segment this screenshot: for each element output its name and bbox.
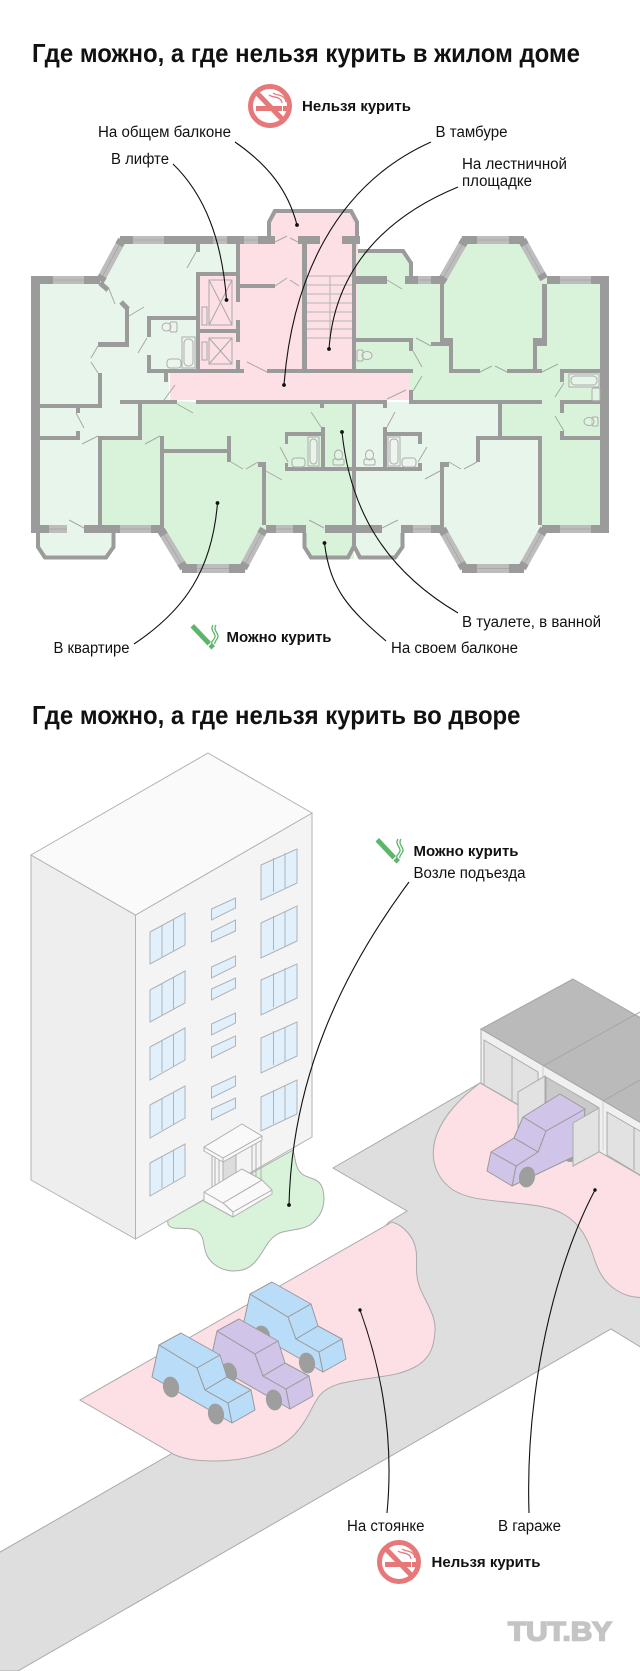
leader and label: в гараже — [498, 1188, 597, 1535]
legend label: Нельзя курить — [302, 98, 411, 115]
leader and label: на общем балконе — [98, 124, 299, 227]
zone: smoking allowed near entrance — [168, 1150, 324, 1271]
garage door right — [607, 1112, 640, 1178]
legend label: Можно курить — [414, 843, 518, 860]
fixtures: sinks — [167, 359, 600, 467]
leader and label: на своем балконе — [323, 541, 518, 657]
legend: smoking allowed in yard — [376, 838, 518, 864]
leader and label: на своем балконе: На своем балконе — [391, 640, 518, 657]
leader and label: на стоянке — [347, 1308, 424, 1535]
illustration: yard — [0, 753, 640, 1671]
legend: smoking allowed in floor plan — [190, 624, 332, 650]
window strips — [49, 236, 591, 573]
zone: lower-left apartment (green) — [100, 402, 354, 572]
road — [0, 1083, 640, 1671]
zone: parking (no smoking) — [80, 1222, 435, 1461]
stairs — [307, 276, 352, 338]
icon: cigarette green — [376, 838, 403, 864]
car: purple middle — [210, 1319, 313, 1412]
windows: left column — [150, 913, 185, 1196]
title: yard section: Где можно, а где нельзя курить во дворе — [32, 700, 520, 730]
garages — [481, 979, 640, 1189]
leader and label: на общем балконе: На общем балконе — [98, 124, 231, 141]
zone: right apartment (green) — [356, 236, 609, 533]
leader and label: в квартире: В квартире — [54, 640, 130, 657]
open door left — [518, 1076, 545, 1132]
leader and label: на стоянке: На стоянке — [347, 1518, 424, 1535]
leader and label: возле подъезда: Возле подъезда — [414, 865, 526, 882]
car: blue back — [243, 1282, 346, 1375]
legend: no smoking bottom — [380, 1542, 540, 1582]
icon: no smoking — [250, 86, 290, 126]
car: purple in garage — [487, 1094, 585, 1189]
zone: lower-right apartment (light green) — [354, 402, 542, 572]
walls — [31, 211, 609, 573]
leader and label: в тамбуре: В тамбуре — [436, 124, 508, 141]
leader and label: в туалете, в ванной: В туалете, в ванной — [462, 614, 601, 631]
legend label: Можно курить — [226, 629, 332, 646]
zone: common areas (pink) — [170, 209, 409, 400]
legend label: Нельзя курить — [432, 1554, 540, 1571]
doors — [69, 236, 564, 528]
leader and label: в тамбуре — [282, 124, 508, 387]
leader and label: в лифте — [111, 151, 228, 302]
leader and label: в лифте: В лифте — [111, 151, 169, 168]
logo: TUT.BY: TUT.BY — [508, 1616, 612, 1646]
leader and label: в гараже: В гараже — [498, 1518, 561, 1535]
leader and label: на лестничной площадке: площадке — [462, 173, 532, 190]
icon: cigarette green — [190, 624, 218, 650]
zone: garage yard (no smoking) — [433, 1083, 640, 1298]
garage door left — [484, 1040, 538, 1116]
title: floor plan section: Где можно, а где нельзя курить в жилом доме — [32, 38, 580, 68]
windows: staircase — [212, 898, 236, 1120]
open garage interior — [546, 1077, 598, 1150]
floor plan — [31, 209, 609, 573]
car: blue front — [152, 1333, 255, 1426]
bay windows — [100, 240, 544, 568]
leader and label: в туалете, в ванной — [340, 430, 601, 631]
fixtures: baths — [182, 337, 599, 466]
building — [31, 753, 312, 1239]
legend: no smoking top — [250, 86, 411, 126]
zone: left apartment (light green) — [31, 236, 240, 559]
fixtures: toilets — [162, 322, 598, 465]
leader and label: на лестничной площадке — [327, 156, 567, 351]
icon: no smoking — [380, 1542, 418, 1582]
fixtures: elevators — [202, 280, 232, 364]
open door right — [573, 1108, 599, 1166]
leader and label: возле подъезда — [287, 865, 526, 1207]
leader and label: на лестничной площадке: На лестничной — [462, 156, 567, 173]
leader and label: в квартире — [54, 501, 219, 657]
windows: right column — [261, 849, 297, 1131]
entrance porch — [204, 1124, 272, 1217]
